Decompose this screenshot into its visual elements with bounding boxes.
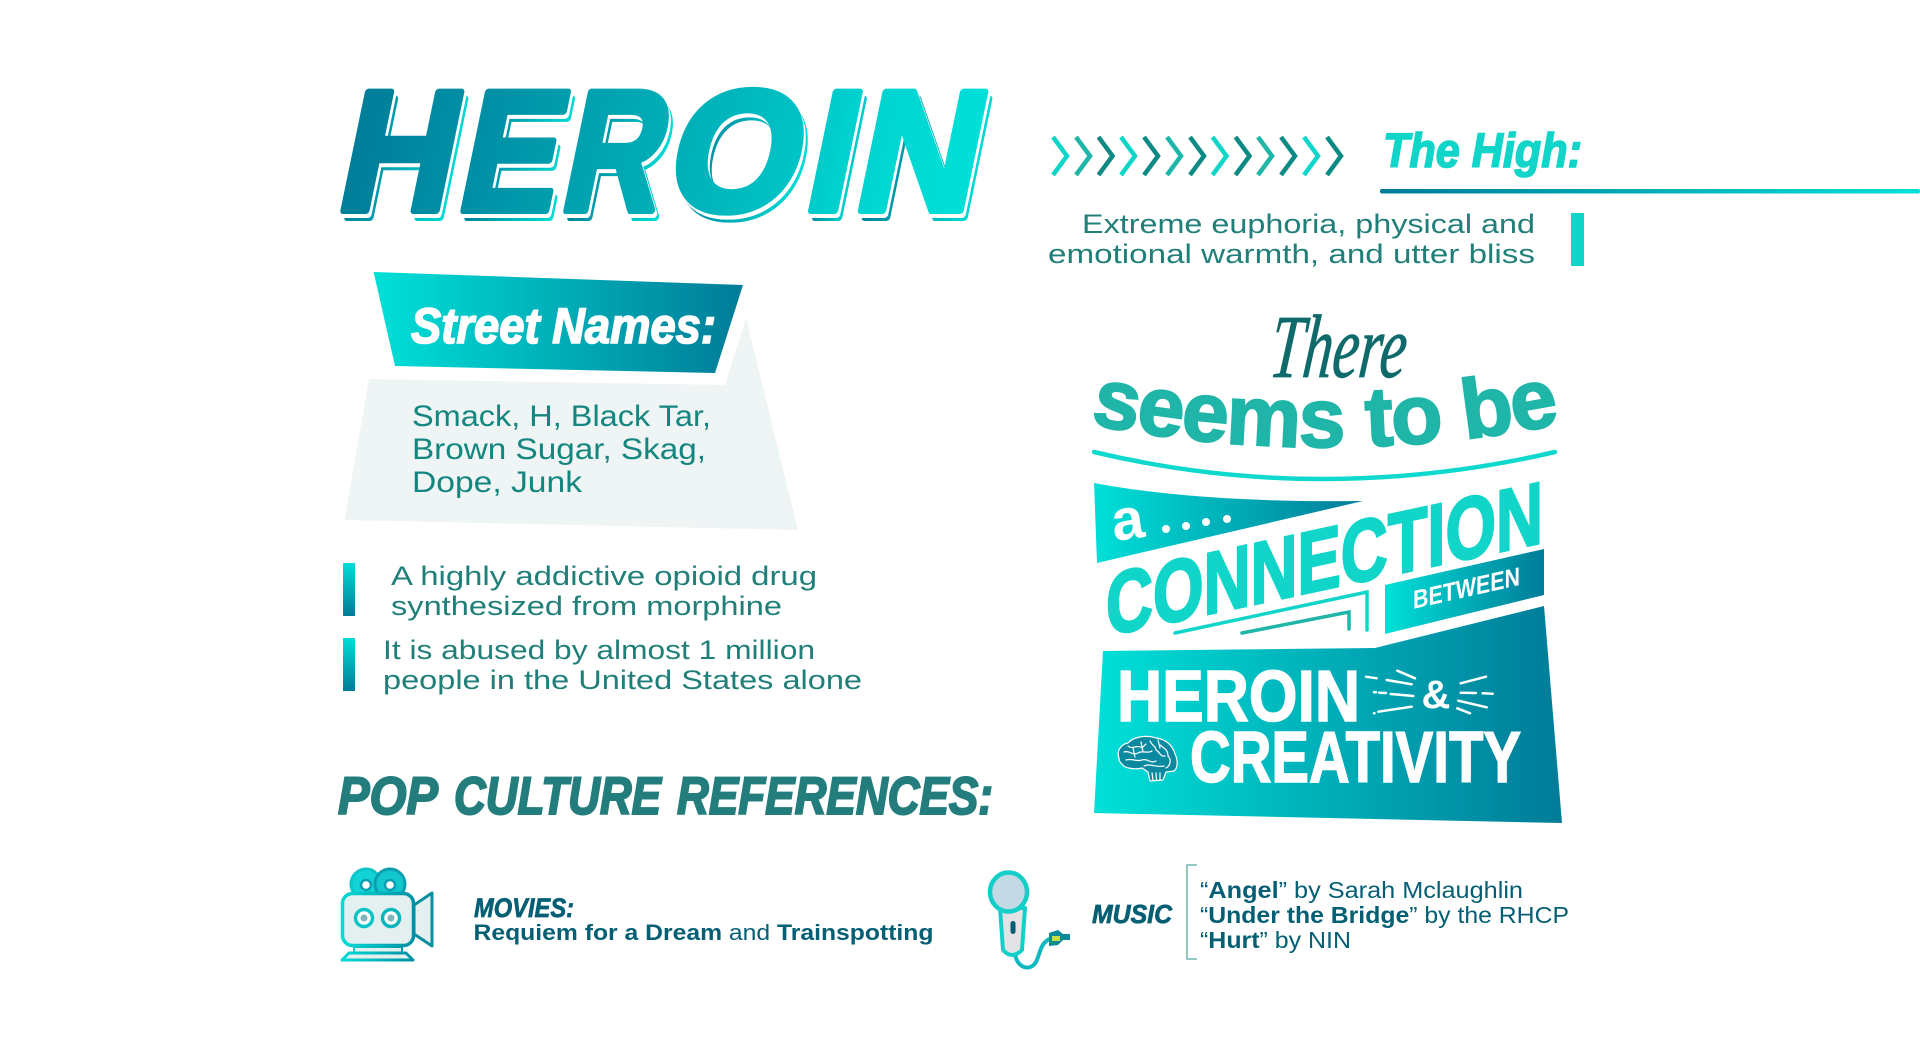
title: HEROIN: O (658, 63, 829, 254)
title: HEROIN: I (793, 54, 878, 247)
movies text: MOVIES: (474, 893, 574, 923)
creativity text: CREATIVITY (1190, 718, 1521, 798)
title: HEROIN: R (553, 63, 691, 255)
panel: street names (344, 272, 798, 530)
title: HEROIN: O (654, 56, 825, 247)
street names list: Smack, H, Black Tar, (412, 400, 711, 433)
decoration: chevrons (1053, 137, 1341, 175)
panel: heroin and creativity (1094, 606, 1562, 823)
street names list background (344, 318, 798, 530)
title: HEROIN: R (551, 60, 689, 252)
lettering: seems to be: seems to be (1094, 375, 1556, 449)
movies text (474, 893, 934, 945)
title: HEROIN: E (448, 60, 586, 252)
fact text: A highly addictive opioid drug (391, 561, 817, 591)
music list: “Angel ” by Sarah Mclaughlin (1200, 877, 1523, 903)
heading: pop culture references: POP (338, 767, 439, 826)
banner: between: BETWEEN (1413, 561, 1520, 615)
fact: opioid drug (343, 561, 817, 621)
heading: the high: The High: (1383, 125, 1582, 178)
street names list (412, 400, 711, 499)
the high bar (1571, 213, 1584, 266)
title: HEROIN: E (446, 56, 584, 248)
banner: between (1385, 549, 1544, 634)
the high description (1048, 209, 1535, 269)
lettering: There: There (1266, 297, 1412, 397)
swoosh line (1094, 452, 1555, 479)
fact text: synthesized from morphine (391, 591, 782, 621)
banner: a....: a (1107, 485, 1149, 554)
heading: pop culture references (338, 767, 993, 826)
burst lines (1366, 671, 1493, 713)
fact text (383, 635, 862, 695)
fact text: It is abused by almost 1 million (383, 635, 815, 665)
music list (1200, 877, 1569, 953)
street names list: Brown Sugar, Skag, (412, 433, 706, 466)
fact bar (343, 563, 355, 616)
street names banner (374, 272, 743, 373)
fact: one million people (343, 635, 862, 695)
street names list: Dope, Junk (412, 466, 583, 499)
icon: movie camera (342, 869, 432, 960)
icon: microphone (990, 872, 1070, 968)
title: HEROIN: R (549, 56, 687, 248)
icon: brain (1118, 736, 1177, 781)
fact bar (343, 638, 355, 691)
the high description: Extreme euphoria, physical and (1082, 209, 1535, 239)
title: HEROIN: I (797, 61, 882, 254)
the high description: emotional warmth, and utter bliss (1048, 239, 1535, 269)
banner: a.... (1094, 483, 1363, 563)
heroin text: HEROIN (1117, 657, 1360, 737)
fact text: people in the United States alone (383, 665, 862, 695)
music list: “Hurt” by NIN (1200, 927, 1351, 953)
title: HEROIN: N (844, 60, 1006, 251)
title: HEROIN: H (329, 63, 483, 255)
heading underline (1380, 189, 1920, 194)
title: HEROIN: E (450, 63, 588, 255)
music bracket (1187, 865, 1197, 959)
fact text (391, 561, 817, 621)
title: HEROIN: I (795, 58, 880, 251)
street names heading: Street Names: (411, 298, 716, 354)
movies text: Requiem for a Dream and Trainspotting (474, 920, 934, 945)
title: HEROIN: N (846, 63, 1008, 254)
connection underlines (1175, 592, 1367, 633)
title: HEROIN: H (325, 56, 479, 248)
music label: MUSIC (1092, 899, 1173, 929)
title: HEROIN (325, 54, 1008, 255)
title: HEROIN: O (656, 60, 827, 251)
lettering: CONNECTION: CONNECTION (1106, 462, 1543, 655)
heading: pop culture references: CULTURE (454, 767, 662, 826)
music list: “Under the Bridge ” by the RHCP (1200, 902, 1569, 928)
heading: pop culture references: REFERENCES: (677, 767, 993, 826)
ampersand: & (1422, 673, 1450, 717)
title: HEROIN: N (842, 56, 1004, 247)
title: HEROIN: H (327, 60, 481, 252)
